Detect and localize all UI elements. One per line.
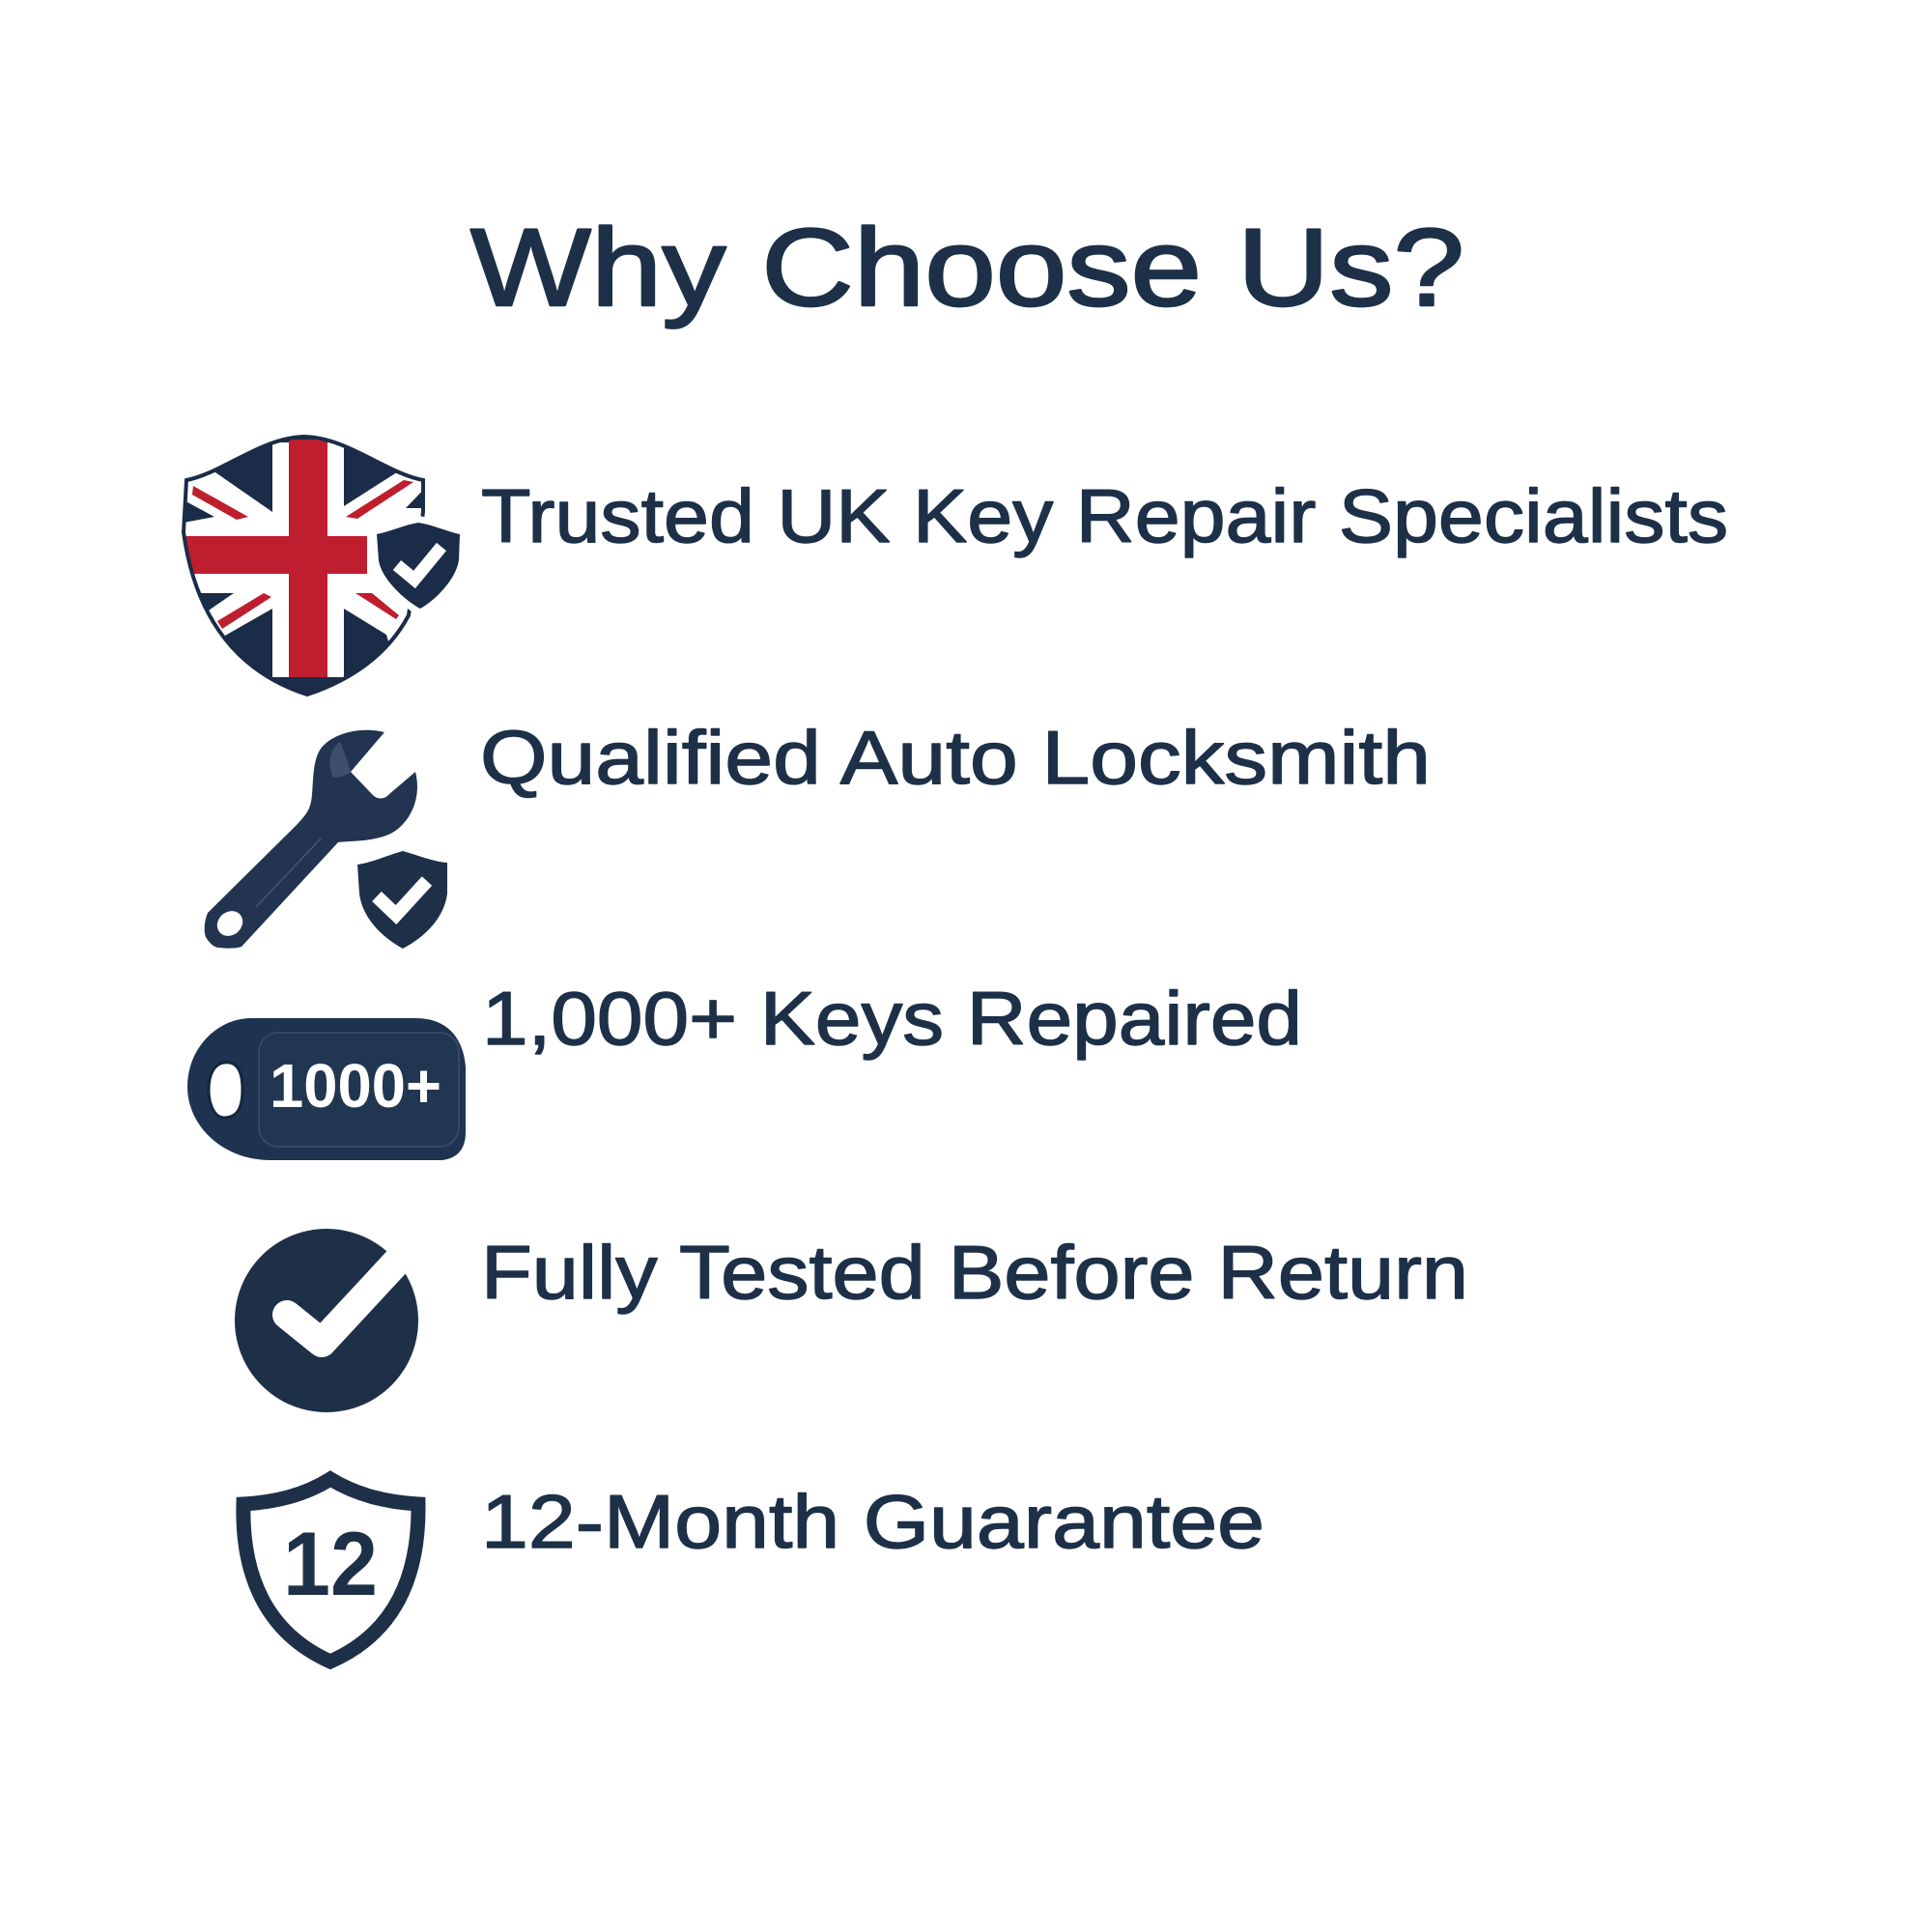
infographic canvas [182,224,1726,1669]
label: qualified locksmith: Qualified Auto Locksmith [480,715,1431,800]
icon: key fob 1000+: 1000+ [270,1051,441,1121]
icon: 12 month shield: 12 [283,1513,378,1614]
label: guarantee: 12-Month Guarantee [481,1479,1264,1564]
icon: union jack shield with check [179,435,460,700]
label: fully tested: Fully Tested Before Return [481,1230,1468,1315]
icon: check circle [235,1229,420,1412]
label: keys repaired: 1,000+ Keys Repaired [482,976,1302,1061]
icon: key fob 1000+ [187,1018,466,1160]
icon: 12 month shield [243,1479,418,1662]
label: trusted specialists: Trusted UK Key Repair Specialists [481,473,1728,558]
title: Why Choose Us? [470,207,1464,329]
icon: wrench with shield [205,730,447,949]
